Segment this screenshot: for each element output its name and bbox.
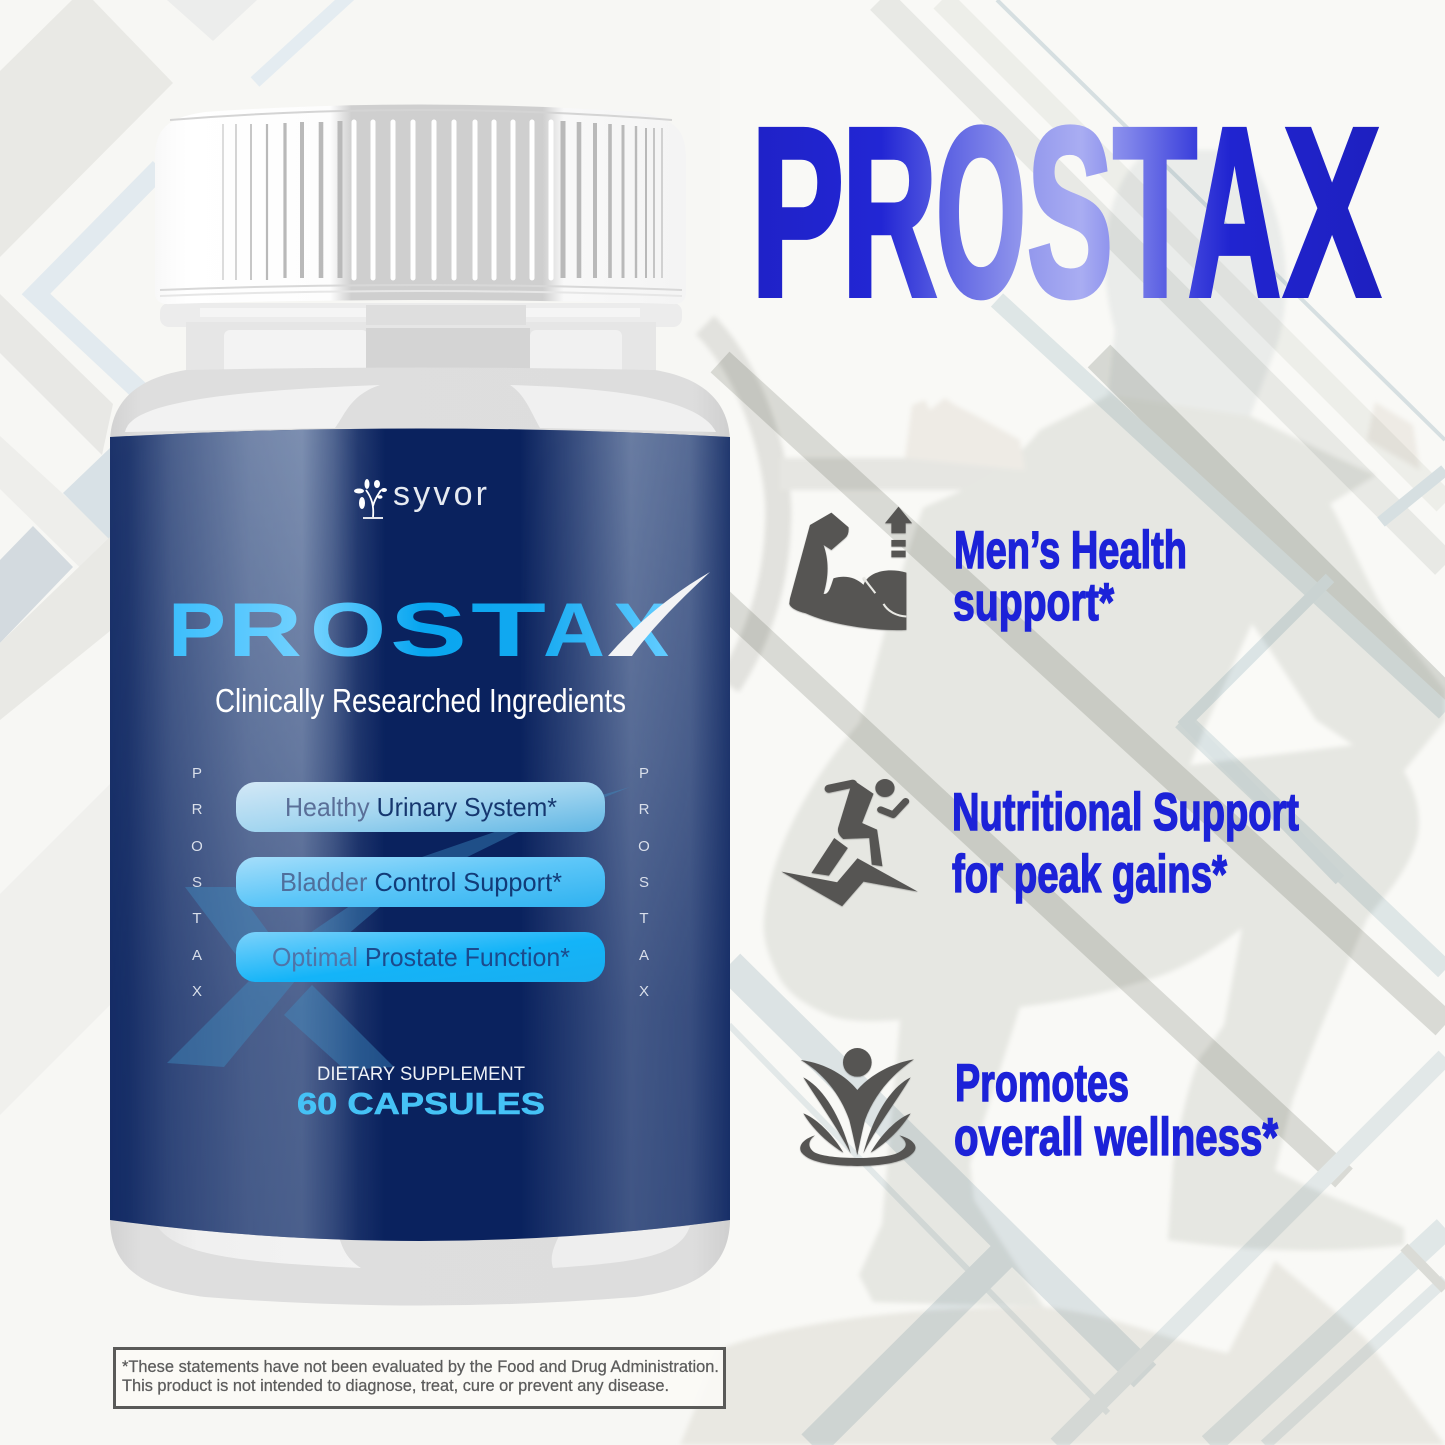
pill: prostate xyxy=(236,932,605,982)
icon: white swoosh xyxy=(608,572,710,656)
pill: bladder xyxy=(236,857,605,907)
brand: syvor: syvor xyxy=(393,475,487,513)
pill: prostate: Optimal Prostate Function* xyxy=(272,942,570,972)
label xyxy=(110,428,730,1241)
logo: PROSTAX: O xyxy=(310,588,386,673)
disclaimer box: *These statements have not been evaluated by the Food and Drug Administration. xyxy=(122,1358,719,1376)
text: Men's Health support xyxy=(953,521,1187,632)
logo: PROSTAX: P xyxy=(168,588,226,673)
title: R xyxy=(842,78,937,346)
bottle body xyxy=(110,368,730,1306)
tagline: Clinically Researched Ingredients xyxy=(215,682,626,719)
title: X xyxy=(1284,78,1380,346)
bottle cap xyxy=(155,104,686,304)
icon: wellness figure xyxy=(800,1048,916,1166)
feature: nutritional support xyxy=(781,779,1299,906)
side letters right: S xyxy=(639,874,649,891)
ground xyxy=(680,1261,1445,1445)
title: O xyxy=(936,78,1026,346)
side letters left: P xyxy=(192,765,202,782)
icon: running man xyxy=(781,779,918,906)
pill: urinary xyxy=(236,782,605,832)
logo: PROSTAX: R xyxy=(228,588,302,673)
brand: syvor xyxy=(354,475,487,518)
feature: overall wellness xyxy=(800,1048,1278,1167)
pill: urinary: Healthy Urinary System* xyxy=(285,792,557,822)
logo: PROSTAX: X xyxy=(613,588,669,673)
side letters left: O xyxy=(191,838,203,855)
text: Promotes overall wellness xyxy=(954,1054,1278,1167)
background: diagonal bands right xyxy=(720,0,1445,1445)
side letters left: A xyxy=(192,947,202,964)
title: T xyxy=(1113,78,1197,346)
capsule count: 60 CAPSULES xyxy=(297,1086,545,1121)
text: Men's Health support: Men’s Health xyxy=(954,521,1187,580)
logo: PROSTAX: S xyxy=(390,588,467,673)
bottle neck xyxy=(160,303,682,382)
text: Nutritional Support for peak gains: Nutritional Support xyxy=(952,783,1299,842)
logo: PROSTAX: A xyxy=(543,588,605,673)
side letters left: R xyxy=(192,801,203,818)
side letters right: T xyxy=(639,910,649,927)
logo: PROSTAX xyxy=(168,572,710,673)
icon: flexed arm xyxy=(789,507,912,630)
text: Promotes overall wellness: overall wellness* xyxy=(954,1108,1278,1167)
side letters left: T xyxy=(192,910,202,927)
text: Men's Health support: support* xyxy=(953,573,1114,632)
fade head xyxy=(1105,150,1286,416)
cap ribs xyxy=(223,121,662,280)
background: silhouette of man squatting with barbell xyxy=(680,150,1445,1445)
hands xyxy=(905,398,1025,470)
plate arc xyxy=(705,325,778,685)
icon: tree xyxy=(354,479,387,518)
title: A xyxy=(1188,78,1281,346)
side letters left: S xyxy=(192,874,202,891)
figure xyxy=(764,150,1445,1307)
text: Nutritional Support for peak gains: for peak gains* xyxy=(952,845,1227,904)
text: Promotes overall wellness: Promotes xyxy=(955,1054,1129,1113)
disclaimer box: This product is not intended to diagnose, treat, cure or prevent any disease. xyxy=(122,1377,669,1395)
title: S xyxy=(1027,78,1113,346)
barbell xyxy=(780,458,1020,490)
side letters right xyxy=(638,765,650,1000)
pill: bladder: Bladder Control Support* xyxy=(280,867,562,897)
title xyxy=(751,78,1380,346)
side letters right: P xyxy=(639,765,649,782)
title: P xyxy=(751,78,844,346)
watermark X xyxy=(167,787,630,1070)
side letters right: A xyxy=(639,947,649,964)
gap between arm and body xyxy=(1190,624,1353,765)
side letters left xyxy=(191,765,203,1000)
disclaimer box xyxy=(114,1348,724,1408)
text: Nutritional Support for peak gains xyxy=(952,783,1299,904)
dietary supplement: DIETARY SUPPLEMENT xyxy=(317,1064,525,1085)
logo: PROSTAX: T xyxy=(471,588,546,673)
side letters left: X xyxy=(192,983,202,1000)
side letters right: R xyxy=(639,801,650,818)
side letters right: O xyxy=(638,838,650,855)
product bottle xyxy=(110,104,730,1306)
feature: men's health xyxy=(789,507,1187,632)
side letters right: X xyxy=(639,983,649,1000)
